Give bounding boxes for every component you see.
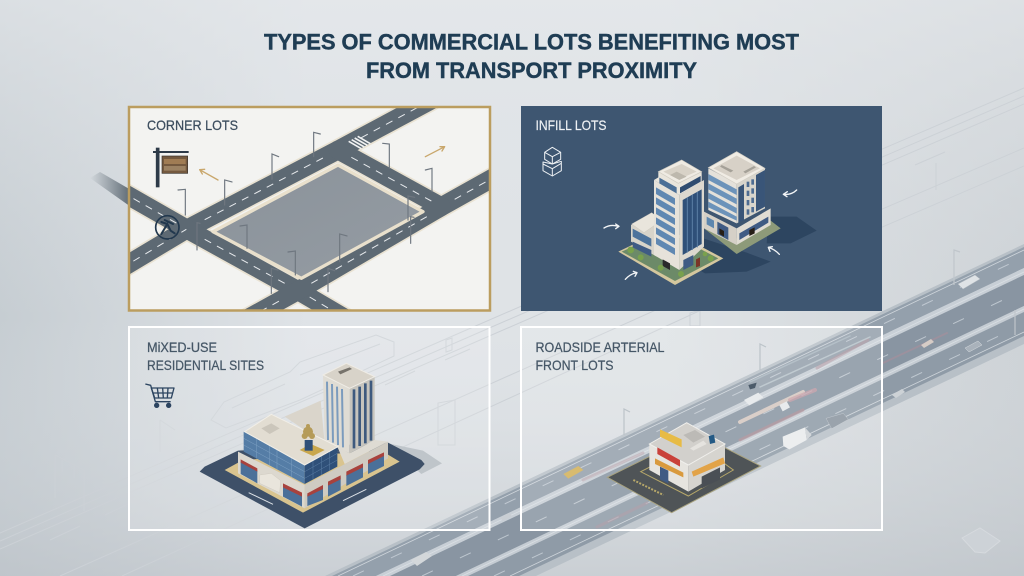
panel: roadside arterial front lots xyxy=(521,327,882,530)
crosswalk xyxy=(349,136,370,149)
street lamps xyxy=(624,344,766,435)
mixed-use label xyxy=(147,339,264,373)
edge lines xyxy=(338,250,1024,576)
mixed-use complex xyxy=(200,363,442,528)
shopfront windows xyxy=(241,455,384,507)
highway xyxy=(325,244,1024,576)
mixed-use label: RESIDENTIAL SITES xyxy=(147,357,264,373)
connecting deck xyxy=(337,440,388,464)
roadside store xyxy=(607,423,761,513)
arrows xyxy=(200,147,445,180)
rear roof xyxy=(285,401,341,453)
entrance canopy xyxy=(260,473,281,493)
corner lots label: CORNER LOTS xyxy=(147,117,238,133)
mixed-use label: MiXED-USE xyxy=(147,339,217,355)
shrubs xyxy=(627,247,714,277)
roof sculpture xyxy=(300,444,325,456)
lane dashes xyxy=(353,257,1024,576)
left tower xyxy=(618,160,723,285)
icon: sale sign xyxy=(153,148,189,187)
icon: pedestrian crossing xyxy=(156,216,179,239)
road stub left of corner lots panel xyxy=(90,172,131,207)
road arrows xyxy=(249,489,366,504)
vehicles on highway outside panels xyxy=(411,275,982,566)
panel border xyxy=(521,327,882,530)
street grid xyxy=(130,108,489,310)
right building xyxy=(704,152,781,254)
glass level xyxy=(244,432,305,484)
motion streaks xyxy=(583,333,947,527)
roof xyxy=(245,414,338,465)
roadside label: FRONT LOTS xyxy=(536,357,614,373)
title xyxy=(264,30,800,83)
infill buildings xyxy=(604,152,817,285)
panel: corner lots xyxy=(128,106,492,312)
tower xyxy=(323,375,350,453)
lamp posts xyxy=(178,132,432,293)
podium faces xyxy=(238,452,305,508)
light poles outside panels xyxy=(954,250,1015,335)
central lot xyxy=(213,165,423,278)
panel border xyxy=(129,327,490,530)
lot access arrows xyxy=(604,190,797,279)
infill lots label: INFILL LOTS xyxy=(536,117,606,133)
roadside label xyxy=(536,339,665,373)
vehicles xyxy=(563,383,848,479)
panel: infill lots xyxy=(521,106,882,311)
icon: shopping cart xyxy=(145,384,174,407)
building shadows xyxy=(693,217,817,273)
title: FROM TRANSPORT PROXIMITY xyxy=(366,58,697,83)
title: TYPES OF COMMERCIAL LOTS BENEFITING MOST xyxy=(264,30,800,54)
panel: mixed-use residential sites xyxy=(129,327,490,530)
panel border xyxy=(129,107,490,310)
faint object bottom right xyxy=(962,528,1000,553)
roadside label: ROADSIDE ARTERIAL xyxy=(536,339,665,355)
icon: stacked boxes xyxy=(543,147,561,176)
